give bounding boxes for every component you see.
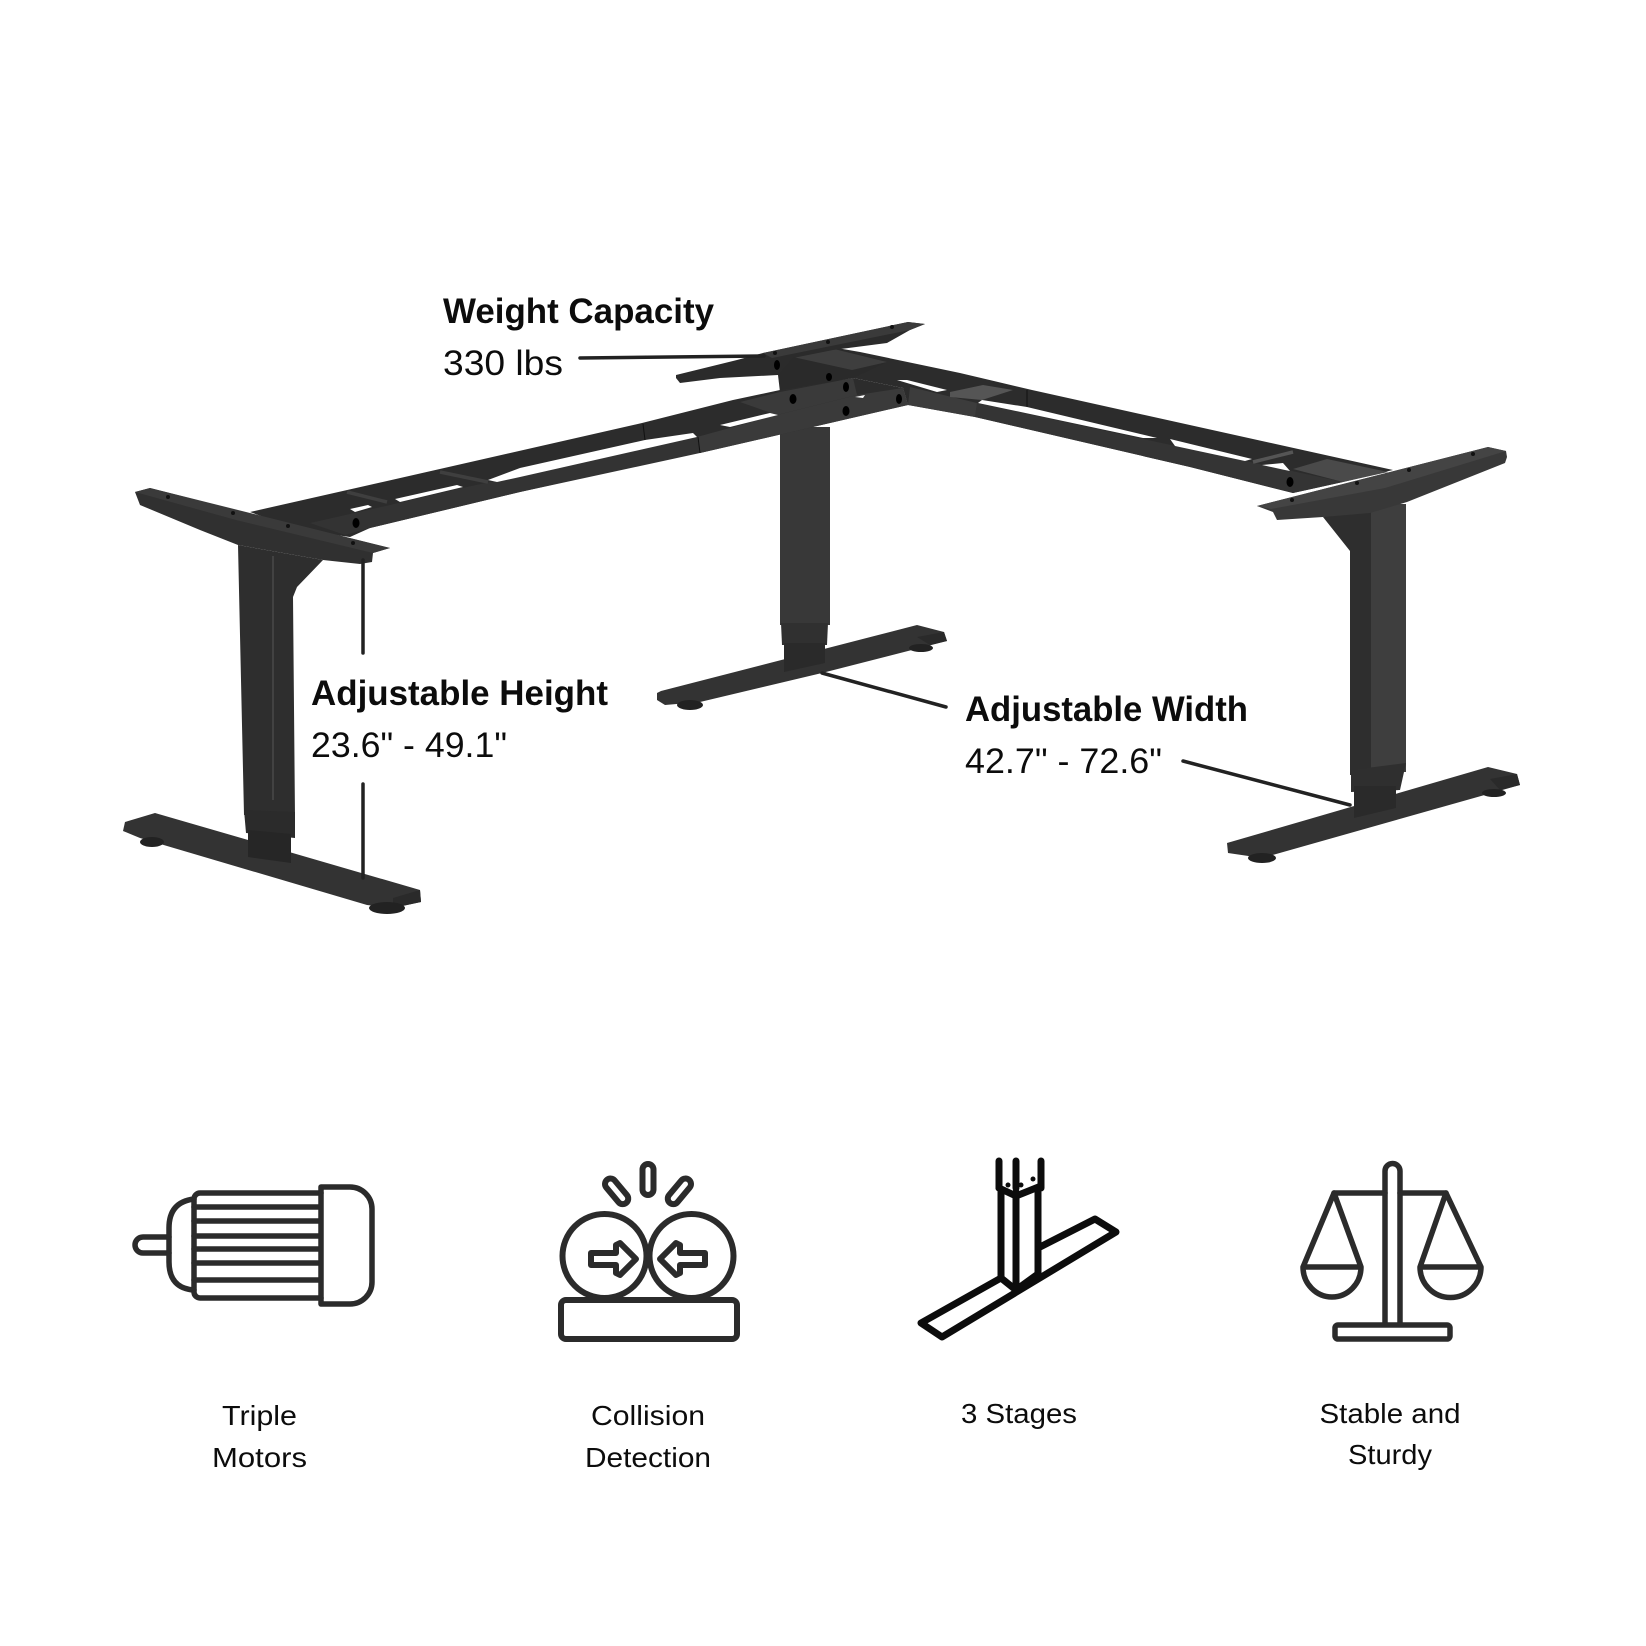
right leg — [1227, 447, 1520, 863]
right beam — [837, 348, 1393, 493]
callout: adjustable height: Adjustable Height — [311, 674, 608, 713]
feature: stable and sturdy: Sturdy — [1348, 1439, 1432, 1470]
feature: collision detection: Detection — [585, 1442, 711, 1473]
center leg — [657, 427, 947, 710]
feature: collision detection — [561, 1164, 737, 1473]
callout: weight capacity: Weight Capacity — [443, 292, 715, 331]
label: 3 stages: 3 Stages — [961, 1398, 1077, 1429]
feature: triple motors — [135, 1187, 372, 1473]
label: stable and sturdy: Stable and — [1320, 1398, 1460, 1429]
callout: weight capacity: 330 lbs — [443, 344, 563, 383]
icon: collision — [561, 1164, 737, 1339]
callout: adjustable height — [311, 560, 608, 878]
callout: adjustable width: 42.7" - 72.6" — [965, 742, 1162, 781]
callout: weight capacity — [443, 292, 764, 383]
left leg — [123, 488, 421, 914]
center top bracket — [676, 322, 925, 383]
icon: telescopic leg — [921, 1161, 1116, 1337]
icon: motor — [135, 1187, 372, 1304]
icon: balance scale — [1303, 1164, 1481, 1339]
left beam — [250, 373, 908, 537]
callout: adjustable height: 23.6" - 49.1" — [311, 726, 507, 765]
label: collision detection: Collision — [591, 1400, 705, 1431]
callout: adjustable width: Adjustable Width — [965, 690, 1248, 729]
label: triple motors: Triple — [222, 1400, 297, 1431]
callout: adjustable width — [822, 673, 1350, 805]
feature: triple motors: Motors — [212, 1442, 307, 1473]
feature: stable and sturdy — [1303, 1164, 1481, 1470]
center hub — [778, 348, 887, 392]
feature: 3 stages — [921, 1161, 1116, 1429]
desk frame — [123, 322, 1520, 914]
